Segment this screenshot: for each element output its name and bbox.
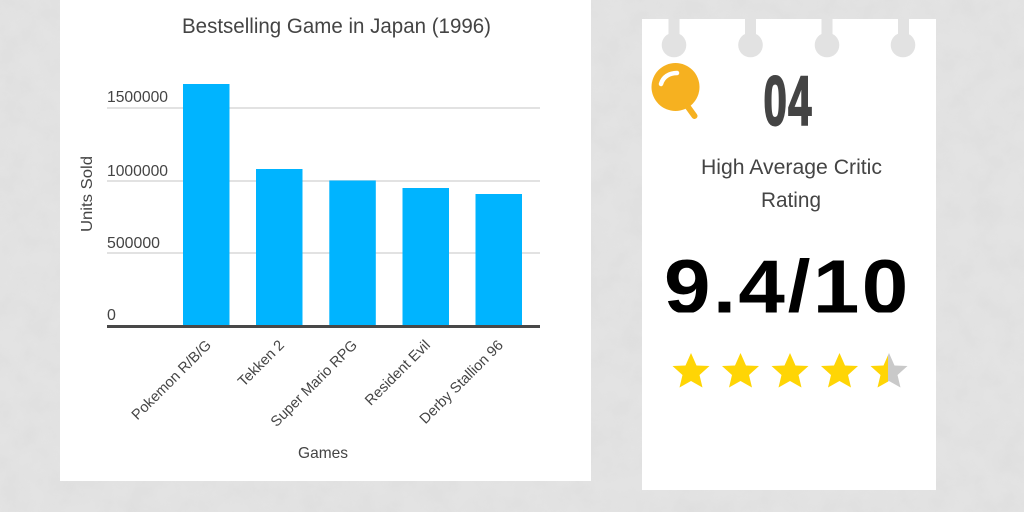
panel: bar chart — [60, 0, 591, 481]
rating caption: High Average Critic — [701, 156, 882, 179]
icon: magnifying glass — [652, 63, 700, 116]
y axis tick labels: 1000000 — [107, 163, 168, 180]
y axis tick labels: 500000 — [107, 235, 160, 252]
x axis category labels: Pokemon R/B/G — [129, 338, 215, 423]
chart title: Bestselling Game in Japan (1996) — [182, 15, 491, 38]
notepad rings — [662, 19, 915, 57]
bars — [183, 84, 522, 326]
x axis category labels: Super Mario RPG — [268, 338, 361, 430]
y axis tick labels: 1500000 — [107, 89, 168, 106]
rating caption — [701, 156, 882, 212]
y axis title: Units Sold — [79, 156, 96, 232]
score: 9.4/10 — [664, 245, 908, 329]
x axis category labels — [129, 338, 507, 430]
rating caption: Rating — [761, 189, 821, 212]
x axis title: Games — [298, 445, 348, 462]
x axis category labels: Resident Evil — [362, 338, 434, 409]
panel: notepad rating card — [642, 19, 936, 490]
x axis category labels: Derby Stallion 96 — [417, 338, 507, 427]
y axis tick labels: 0 — [107, 307, 116, 324]
item number: 04 — [764, 63, 812, 141]
star rating — [672, 353, 908, 388]
x axis category labels: Tekken 2 — [235, 338, 288, 390]
y axis tick labels — [107, 89, 168, 324]
